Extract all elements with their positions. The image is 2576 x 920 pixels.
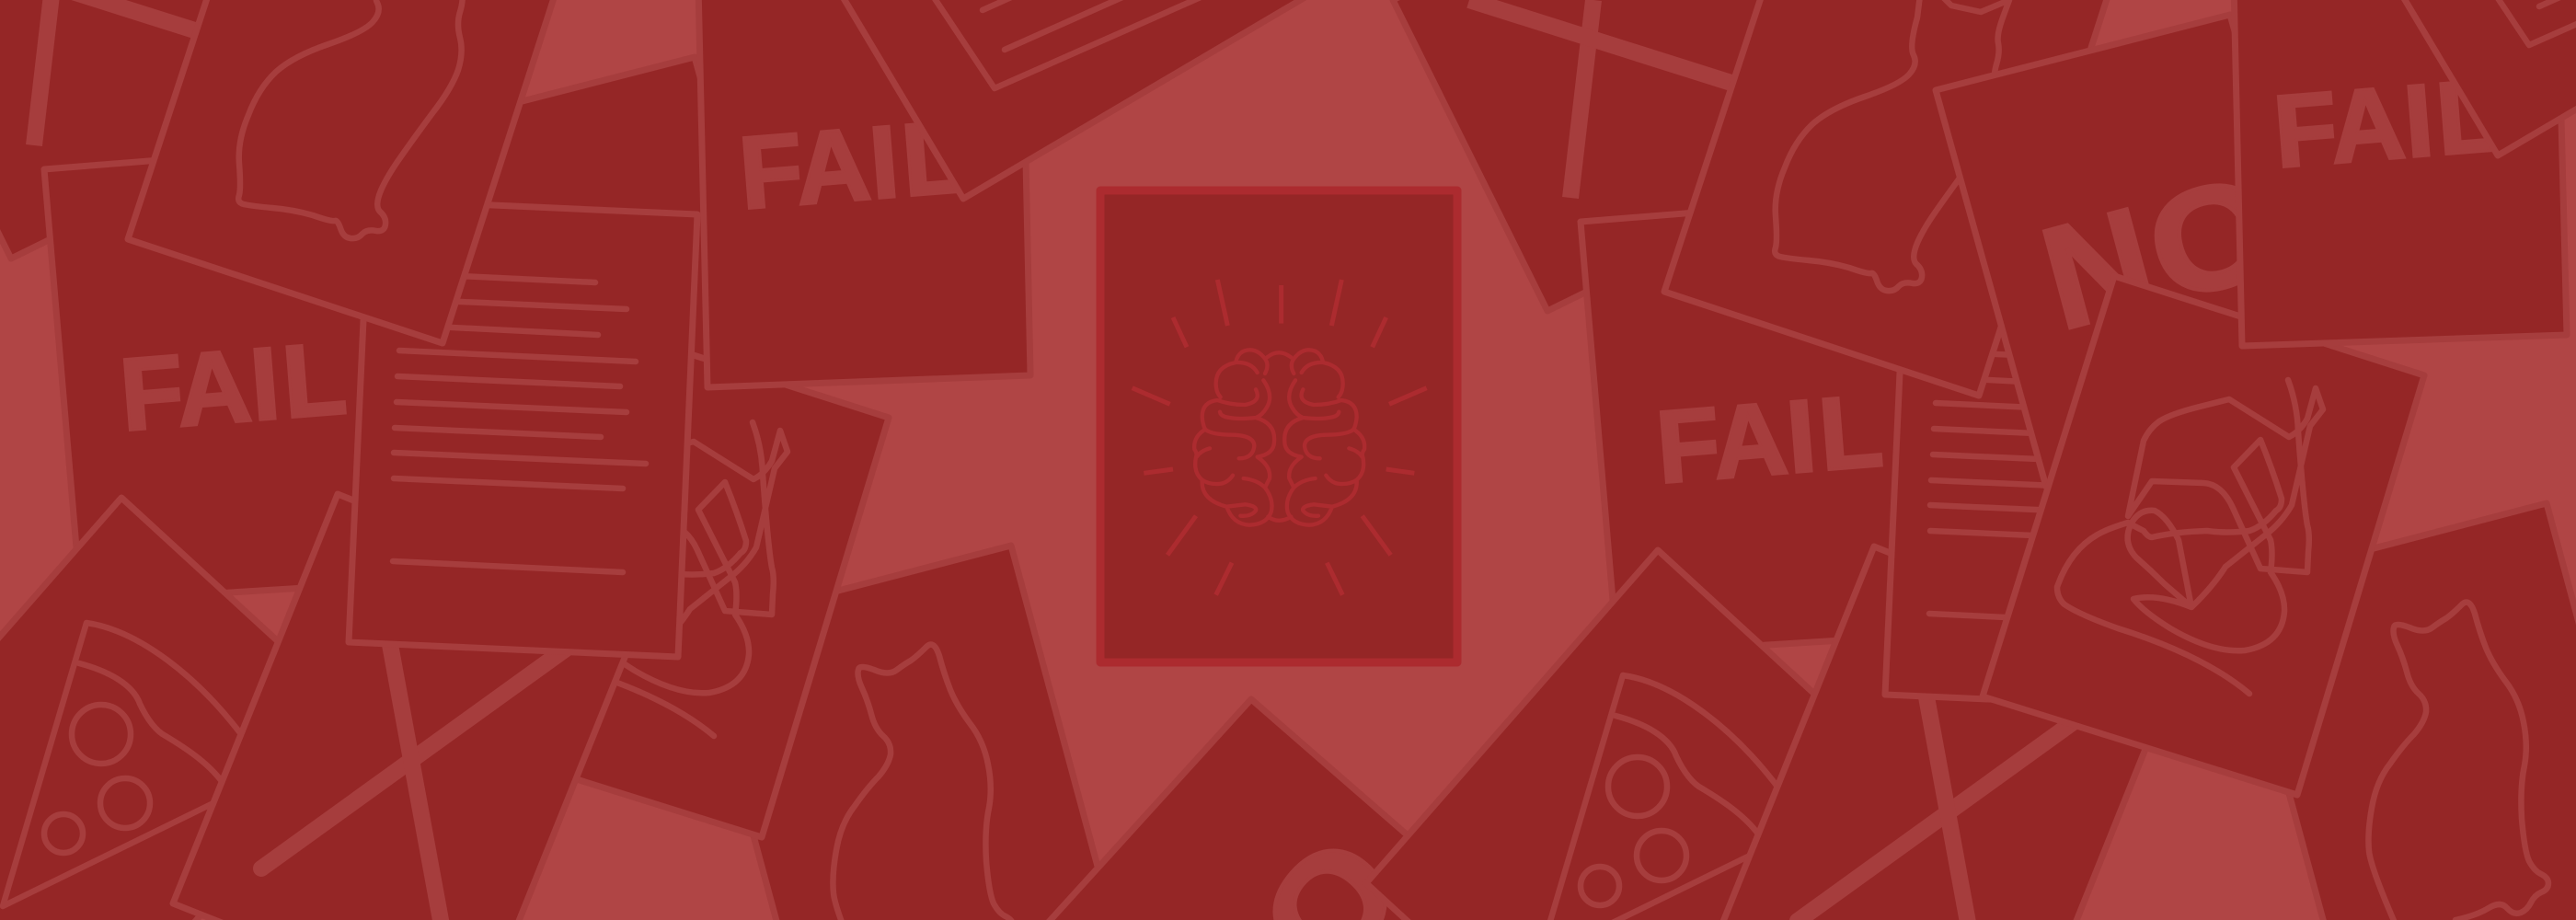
card: FAIL sheet left: FAIL — [116, 320, 351, 453]
card: text document right — [1885, 252, 2234, 709]
card: NO sheet right: N — [2027, 177, 2170, 361]
card: FAIL sheet top right — [2232, 0, 2567, 346]
card: scribble sheet right — [1983, 276, 2424, 795]
card: NO sheet hidden left — [400, 57, 805, 529]
icon: brain with rays — [1133, 280, 1427, 595]
card: pizza sheet right — [1366, 550, 1904, 920]
card: text document left — [349, 200, 697, 657]
card: crossed sheet top left — [0, 0, 313, 259]
card: NO sheet bottom centre — [975, 699, 1564, 920]
card: FAIL sheet right: FAIL — [1652, 373, 1887, 505]
card: pizza sheet top centre left — [782, 0, 1380, 199]
card: FAIL sheet right — [1581, 181, 2125, 654]
card: cat sheet top left — [128, 0, 589, 343]
card: cat sheet top right — [1664, 0, 2125, 396]
card: scribble sheet left — [447, 318, 889, 837]
panel: central brain card — [1100, 190, 1457, 662]
card: cat sheet bottom left — [697, 546, 1242, 920]
card: FAIL sheet top centre left: FAIL — [735, 98, 970, 231]
card: cat sheet bottom right — [2233, 503, 2576, 920]
card: NO sheet right: O — [2132, 144, 2294, 333]
card: FAIL sheet top right: FAIL — [2270, 57, 2504, 190]
card: pizza sheet left — [0, 498, 368, 920]
card: crossed sheet top right — [1393, 0, 1849, 311]
card: FAIL sheet top centre left — [697, 0, 1030, 387]
card: crossed sheet bottom left — [173, 494, 641, 920]
card: NO sheet right — [1936, 15, 2340, 487]
card: FAIL sheet left — [44, 129, 589, 602]
card: pizza sheet top right — [2317, 0, 2576, 155]
card: crossed sheet bottom right — [1709, 546, 2178, 920]
